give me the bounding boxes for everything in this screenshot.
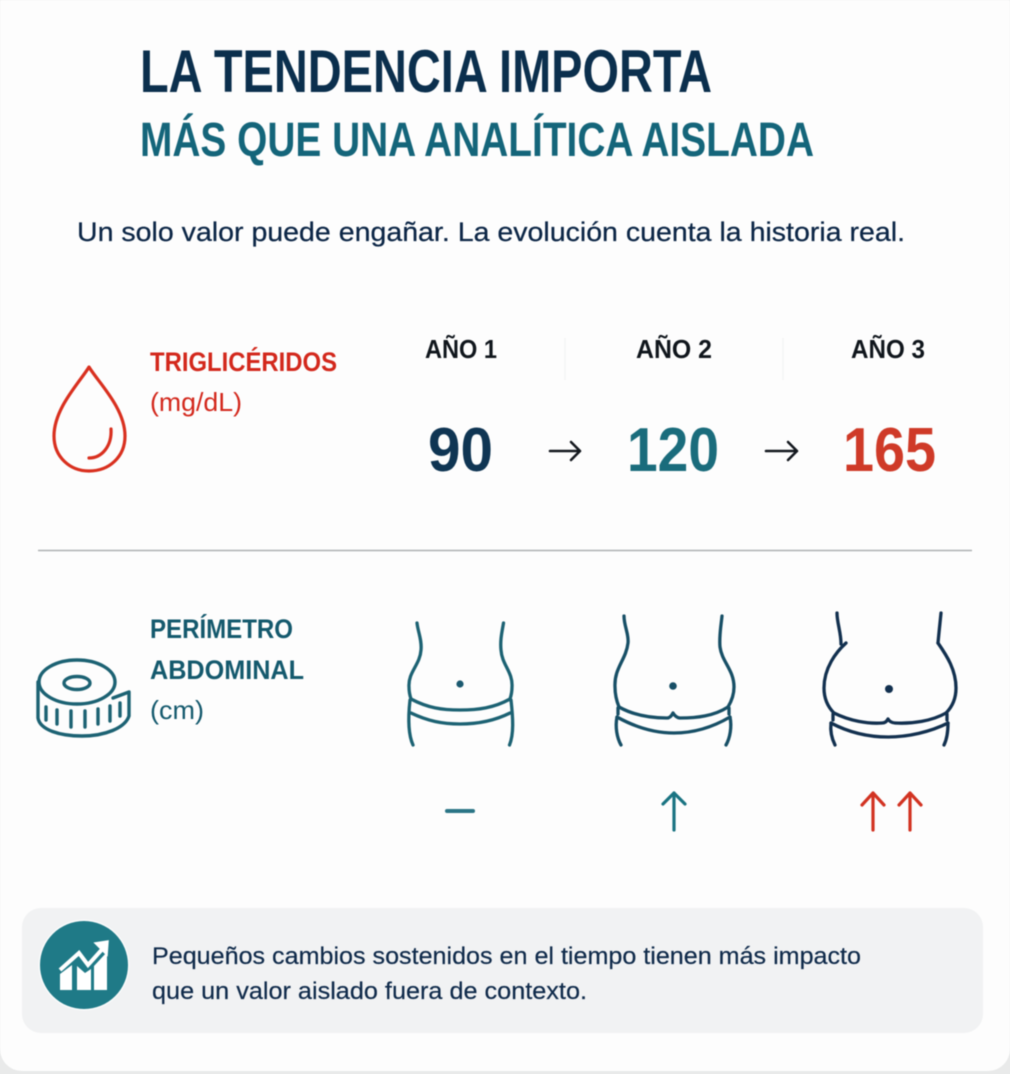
year headers: AÑO 2	[636, 334, 712, 364]
year headers: AÑO 1	[425, 334, 497, 364]
illustration: torso year 1	[409, 623, 513, 745]
icon: blood drop	[54, 367, 125, 471]
panel: abdominal perimeter row	[38, 613, 956, 830]
label: triglycerides: (mg/dL)	[150, 387, 242, 417]
value: year 1: 90	[428, 416, 493, 485]
panel: triglycerides row	[54, 334, 936, 485]
title	[140, 38, 814, 167]
title: LA TENDENCIA IMPORTA	[140, 38, 712, 105]
indicator: no change	[447, 809, 473, 813]
label: abdominal perimeter: ABDOMINAL	[150, 655, 304, 685]
year headers	[425, 334, 925, 364]
illustration: torso year 2	[615, 616, 734, 745]
indicator: one arrow up	[663, 793, 685, 830]
panel: takeaway	[22, 908, 983, 1033]
illustration: torso year 3	[824, 613, 956, 745]
takeaway text: Pequeños cambios sostenidos en el tiempo tienen más impacto	[152, 943, 861, 970]
icon: growth chart	[38, 920, 130, 1010]
label: abdominal perimeter: (cm)	[150, 695, 204, 725]
title: MÁS QUE UNA ANALÍTICA AISLADA	[140, 113, 814, 167]
takeaway text: que un valor aislado fuera de contexto.	[152, 978, 587, 1005]
value: year 2: 120	[627, 416, 719, 485]
arrow: year 1 to 2	[550, 442, 580, 460]
label: abdominal perimeter	[150, 613, 304, 725]
icon: measuring tape	[38, 660, 129, 736]
label: triglycerides: TRIGLICÉRIDOS	[150, 346, 337, 377]
subtitle: Un solo valor puede engañar. La evolución cuenta la historia real.	[77, 217, 905, 247]
takeaway text	[152, 943, 861, 1005]
indicator: two arrows up	[862, 793, 921, 830]
value: year 3: 165	[843, 416, 936, 485]
label: abdominal perimeter: PERÍMETRO	[150, 613, 293, 644]
label: triglycerides	[150, 346, 337, 417]
year headers: AÑO 3	[851, 334, 925, 364]
arrow: year 2 to 3	[766, 442, 797, 460]
